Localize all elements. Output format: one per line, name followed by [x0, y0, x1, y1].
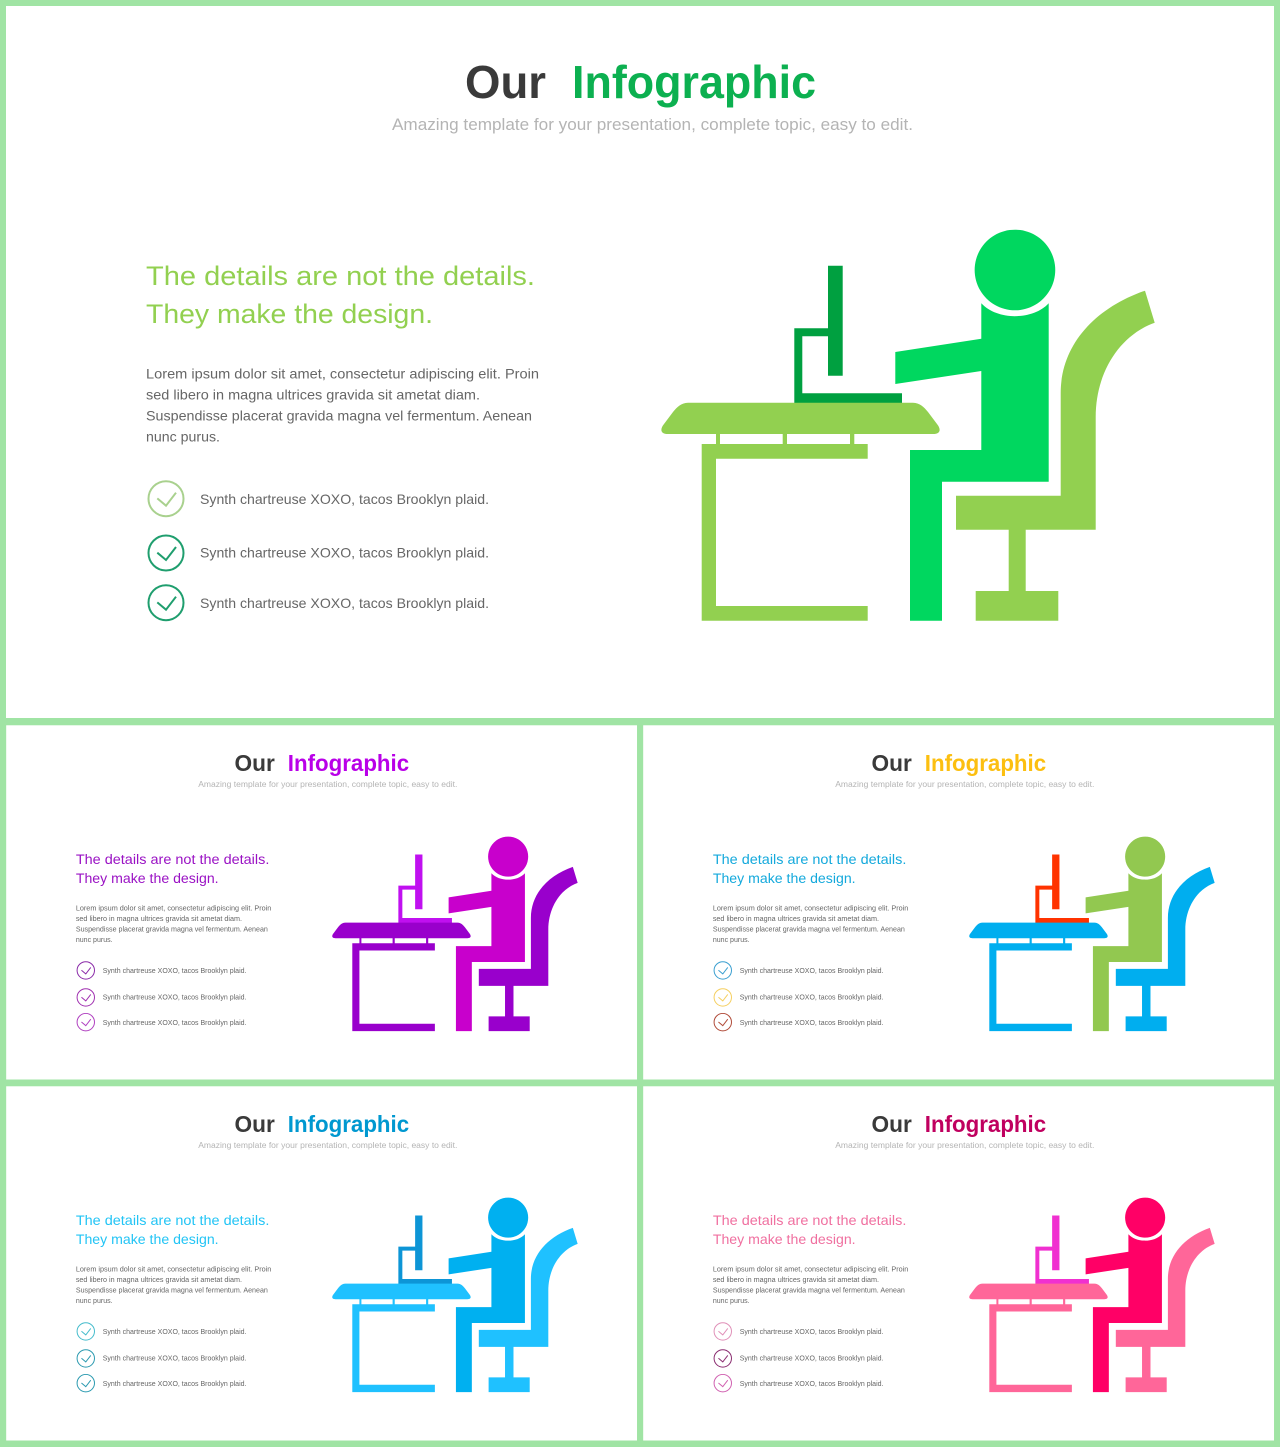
subtitle: Amazing template for your presentation, complete topic, easy to edit. [198, 1140, 457, 1150]
check item 1: Synth chartreuse XOXO, tacos Brooklyn plaid. [740, 968, 884, 975]
heading: The details are not the details. [713, 852, 906, 867]
body text: Lorem ipsum dolor sit amet, consectetur adipiscing elit. Proin [713, 906, 908, 913]
heading: They make the design. [146, 299, 433, 329]
title [235, 750, 409, 776]
title: Our [235, 1111, 275, 1137]
title [465, 56, 816, 108]
icon: chair [1116, 867, 1215, 1031]
icon: person [1086, 1198, 1165, 1392]
body text: nunc purus. [713, 1298, 750, 1305]
icon: chair [1116, 1228, 1215, 1392]
heading: The details are not the details. [76, 1213, 269, 1228]
check item 3 [77, 1013, 247, 1031]
icon: monitor [1035, 1215, 1089, 1284]
check item 1 [714, 1323, 884, 1340]
check item 2 [714, 989, 884, 1006]
icon: chair [479, 1228, 578, 1392]
title [872, 1111, 1046, 1137]
title: Infographic [288, 750, 409, 776]
icon: monitor [398, 854, 452, 923]
check item 2 [148, 536, 489, 570]
check item 1 [77, 1323, 247, 1340]
body text: sed libero in magna ultrices gravida sit ametat diam. [76, 1277, 242, 1284]
check item 3 [148, 585, 489, 620]
heading [76, 1213, 269, 1247]
body text: Suspendisse placerat gravida magna vel fermentum. Aenean [76, 926, 268, 933]
body text [76, 906, 271, 944]
check item 2: Synth chartreuse XOXO, tacos Brooklyn plaid. [740, 995, 884, 1002]
title: Our [465, 56, 546, 108]
check item 2: Synth chartreuse XOXO, tacos Brooklyn plaid. [200, 544, 489, 560]
panel: purple slide [6, 725, 637, 1080]
body text [146, 366, 539, 444]
icon: person [449, 1198, 528, 1392]
check item 3: Synth chartreuse XOXO, tacos Brooklyn plaid. [740, 1020, 884, 1027]
body text: nunc purus. [76, 1298, 113, 1305]
checklist [77, 962, 247, 1031]
body text: Suspendisse placerat gravida magna vel fermentum. Aenean [146, 408, 532, 424]
panel: blue slide [6, 1086, 637, 1441]
check item 3: Synth chartreuse XOXO, tacos Brooklyn plaid. [103, 1381, 247, 1388]
panel: multicolour slide [643, 725, 1274, 1080]
check item 1 [714, 962, 884, 979]
check item 2: Synth chartreuse XOXO, tacos Brooklyn plaid. [103, 995, 247, 1002]
title [872, 750, 1046, 776]
icon: monitor [1035, 854, 1089, 923]
icon: person [895, 230, 1055, 621]
panel: main green slide [6, 6, 1274, 718]
heading: They make the design. [76, 871, 219, 886]
heading: The details are not the details. [76, 852, 269, 867]
icon: person [1086, 837, 1165, 1031]
body text: Lorem ipsum dolor sit amet, consectetur adipiscing elit. Proin [146, 366, 539, 382]
heading [713, 1213, 906, 1247]
heading: They make the design. [713, 1232, 856, 1247]
check item 1: Synth chartreuse XOXO, tacos Brooklyn plaid. [103, 968, 247, 975]
subtitle: Amazing template for your presentation, complete topic, easy to edit. [835, 1140, 1094, 1150]
body text [76, 1267, 271, 1305]
title: Infographic [925, 1111, 1046, 1137]
icon: monitor [398, 1215, 452, 1284]
heading: They make the design. [713, 871, 856, 886]
heading [146, 261, 535, 329]
check item 2: Synth chartreuse XOXO, tacos Brooklyn plaid. [740, 1356, 884, 1363]
check item 2 [77, 1350, 247, 1367]
check item 3 [714, 1374, 884, 1392]
body text: sed libero in magna ultrices gravida sit ametat diam. [713, 1277, 879, 1284]
icon: monitor [794, 266, 902, 403]
body text: Suspendisse placerat gravida magna vel fermentum. Aenean [713, 1287, 905, 1294]
icon: desk [332, 923, 471, 1031]
title: Infographic [925, 750, 1046, 776]
subtitle: Amazing template for your presentation, complete topic, easy to edit. [198, 779, 457, 789]
check item 2: Synth chartreuse XOXO, tacos Brooklyn plaid. [103, 1356, 247, 1363]
check item 1 [77, 962, 247, 979]
subtitle: Amazing template for your presentation, complete topic, easy to edit. [835, 779, 1094, 789]
icon: desk [332, 1284, 471, 1392]
heading [713, 852, 906, 886]
check item 2 [77, 989, 247, 1006]
check item 2 [714, 1350, 884, 1367]
icon: desk [969, 1284, 1108, 1392]
check item 3: Synth chartreuse XOXO, tacos Brooklyn plaid. [740, 1381, 884, 1388]
check item 3: Synth chartreuse XOXO, tacos Brooklyn plaid. [200, 595, 489, 611]
title: Infographic [288, 1111, 409, 1137]
checklist [714, 962, 884, 1031]
title: Our [235, 750, 275, 776]
body text: Lorem ipsum dolor sit amet, consectetur adipiscing elit. Proin [76, 1267, 271, 1274]
icon: desk [969, 923, 1108, 1031]
title: Our [872, 750, 912, 776]
check item 3: Synth chartreuse XOXO, tacos Brooklyn plaid. [103, 1020, 247, 1027]
title [235, 1111, 409, 1137]
body text: Lorem ipsum dolor sit amet, consectetur adipiscing elit. Proin [76, 906, 271, 913]
check item 1 [148, 481, 489, 516]
heading [76, 852, 269, 886]
title: Infographic [572, 56, 816, 108]
icon: person [449, 837, 528, 1031]
body text: Suspendisse placerat gravida magna vel fermentum. Aenean [76, 1287, 268, 1294]
heading: The details are not the details. [713, 1213, 906, 1228]
body text: nunc purus. [146, 428, 220, 444]
checklist [77, 1323, 247, 1392]
heading: They make the design. [76, 1232, 219, 1247]
body text: nunc purus. [76, 937, 113, 944]
checklist [148, 481, 489, 620]
body text: Lorem ipsum dolor sit amet, consectetur adipiscing elit. Proin [713, 1267, 908, 1274]
title: Our [872, 1111, 912, 1137]
check item 3 [714, 1013, 884, 1031]
panel: pink slide [643, 1086, 1274, 1441]
check item 1: Synth chartreuse XOXO, tacos Brooklyn plaid. [740, 1329, 884, 1336]
check item 1: Synth chartreuse XOXO, tacos Brooklyn plaid. [103, 1329, 247, 1336]
checklist [714, 1323, 884, 1392]
check item 3 [77, 1374, 247, 1392]
icon: chair [479, 867, 578, 1031]
check item 1: Synth chartreuse XOXO, tacos Brooklyn plaid. [200, 491, 489, 507]
subtitle: Amazing template for your presentation, complete topic, easy to edit. [392, 115, 913, 134]
body text: sed libero in magna ultrices gravida sit ametat diam. [76, 916, 242, 923]
body text [713, 906, 908, 944]
body text: sed libero in magna ultrices gravida sit ametat diam. [146, 386, 480, 402]
icon: chair [956, 291, 1155, 621]
body text: nunc purus. [713, 937, 750, 944]
heading: The details are not the details. [146, 261, 535, 291]
body text: Suspendisse placerat gravida magna vel fermentum. Aenean [713, 926, 905, 933]
icon: desk [661, 403, 940, 621]
body text: sed libero in magna ultrices gravida sit ametat diam. [713, 916, 879, 923]
body text [713, 1267, 908, 1305]
